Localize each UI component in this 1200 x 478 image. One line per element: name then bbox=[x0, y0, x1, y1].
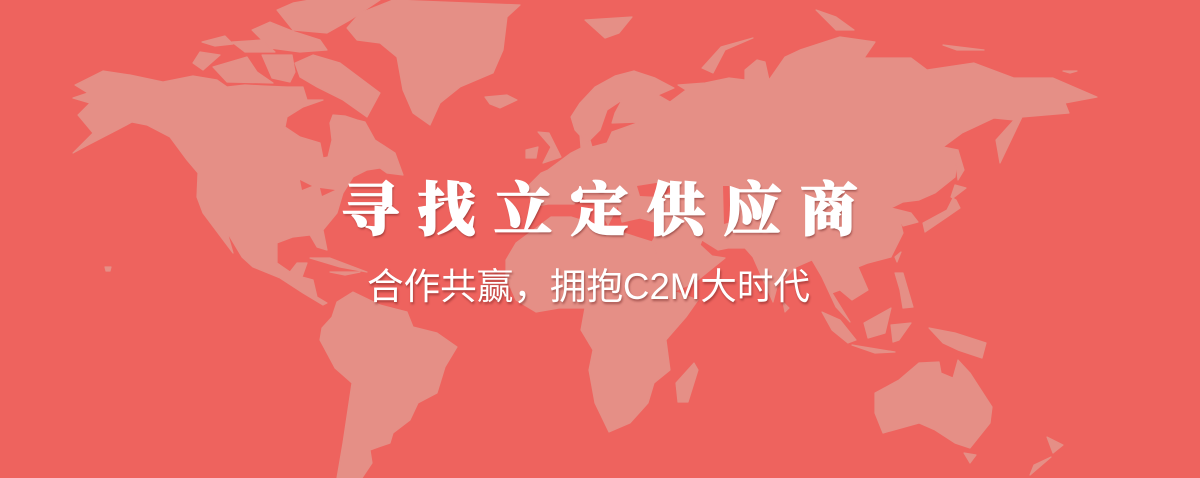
map: South America bbox=[320, 292, 457, 478]
map: New Zealand bbox=[1030, 437, 1063, 475]
subtitle: 合作共赢，拥抱C2M大时代 bbox=[367, 266, 810, 307]
map: Greenland bbox=[347, 0, 520, 125]
map: Hawaii bbox=[105, 267, 111, 271]
map: Arctic islands bbox=[193, 0, 380, 117]
map: Arctic Eurasian islands bbox=[585, 10, 1077, 73]
map: inland seas bbox=[300, 180, 731, 224]
map: Japan and Sakhalin bbox=[923, 150, 966, 232]
title: 寻找立定供应商 bbox=[341, 178, 877, 243]
map: Caribbean islands bbox=[310, 258, 367, 275]
map: British Isles bbox=[526, 132, 561, 163]
map: North America bbox=[73, 71, 403, 305]
map: Indonesian and Philippine islands bbox=[822, 273, 913, 353]
map: Madagascar bbox=[676, 363, 698, 402]
map: Iceland bbox=[485, 95, 517, 108]
map: Taiwan and Sri Lanka bbox=[783, 252, 901, 312]
map: New Guinea bbox=[929, 328, 986, 358]
map: Africa bbox=[506, 217, 698, 432]
map: Australia bbox=[875, 360, 992, 448]
map: Eurasia bbox=[528, 37, 1097, 322]
map: Tasmania bbox=[964, 453, 976, 463]
